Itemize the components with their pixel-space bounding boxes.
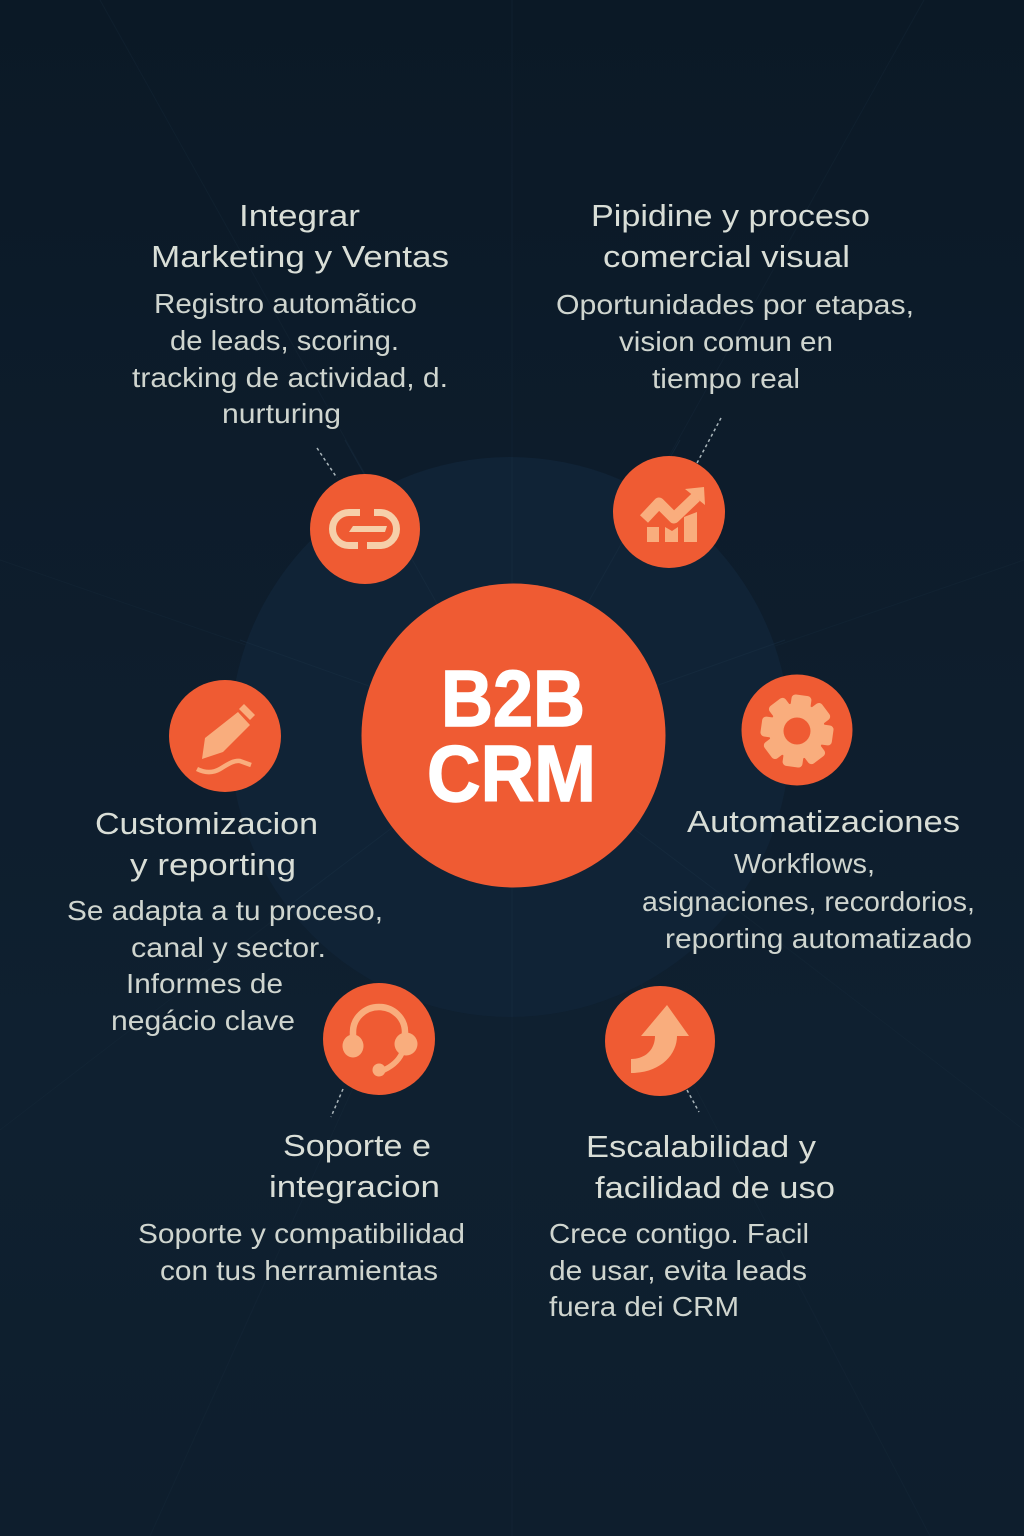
icon: chart with arrow <box>613 456 725 568</box>
background halo circle <box>230 457 790 1017</box>
icon: growth arrow <box>605 986 715 1096</box>
text block: escalabilidad: facilidad de uso <box>595 1170 835 1205</box>
text block: customizacion: y reporting <box>130 847 296 882</box>
text block: integrar marketing y ventas: Integrar <box>239 198 360 233</box>
text block: customizacion: negácio clave <box>111 1005 295 1036</box>
icon: link <box>310 474 420 584</box>
text block: customizacion: Se adapta a tu proceso, <box>67 895 383 926</box>
text block: customizacion: Informes de <box>126 968 283 999</box>
text block: soporte e integracion <box>138 1128 465 1286</box>
text block: escalabilidad: fuera dei CRM <box>549 1291 739 1322</box>
text block: integrar marketing y ventas: Registro automãtico <box>154 288 417 319</box>
text block: customizacion <box>67 806 383 1036</box>
connector: pipeline <box>697 418 721 463</box>
text block: customizacion: Customizacion <box>95 806 318 841</box>
text block: escalabilidad: Crece contigo. Facil <box>549 1218 809 1249</box>
text block: soporte e integracion: Soporte y compatibilidad <box>138 1218 465 1249</box>
icon: pencil <box>169 680 281 792</box>
connector: escalabilidad <box>687 1090 699 1112</box>
text block: automatizaciones <box>642 804 975 954</box>
text block: automatizaciones: Workflows, <box>734 848 875 879</box>
center circle: B2B CRM <box>362 584 666 888</box>
center circle: B2B CRM: CRM <box>427 729 596 818</box>
center circle: B2B CRM: B2B <box>441 654 585 743</box>
text block: integrar marketing y ventas: tracking de actividad, d. <box>132 362 448 393</box>
text block: automatizaciones: Automatizaciones <box>687 804 960 839</box>
text block: integrar marketing y ventas <box>132 198 449 429</box>
text block: integrar marketing y ventas: de leads, scoring. <box>170 325 399 356</box>
connector: soporte <box>331 1089 343 1117</box>
text block: escalabilidad: Escalabilidad y <box>586 1129 817 1164</box>
text block: pipeline: tiempo real <box>652 363 800 394</box>
text block: soporte e integracion: con tus herramientas <box>160 1255 438 1286</box>
icon: gear <box>742 674 852 786</box>
text block: soporte e integracion: integracion <box>269 1169 440 1204</box>
text block: escalabilidad: de usar, evita leads <box>549 1255 807 1286</box>
connector: integrar <box>317 448 337 478</box>
text block: pipeline <box>556 198 914 394</box>
text block: customizacion: canal y sector. <box>131 932 326 963</box>
text block: pipeline: Pipidine y proceso <box>591 198 870 233</box>
text block: pipeline: comercial visual <box>603 239 850 274</box>
icon: headset <box>323 983 435 1095</box>
text block: automatizaciones: reporting automatizado <box>665 923 972 954</box>
text block: integrar marketing y ventas: Marketing y Ventas <box>151 239 449 274</box>
text block: escalabilidad <box>549 1129 835 1322</box>
text block: integrar marketing y ventas: nurturing <box>222 398 341 429</box>
text block: pipeline: vision comun en <box>619 326 833 357</box>
text block: soporte e integracion: Soporte e <box>283 1128 431 1163</box>
text block: automatizaciones: asignaciones, recordorios, <box>642 886 975 917</box>
text block: pipeline: Oportunidades por etapas, <box>556 289 914 320</box>
